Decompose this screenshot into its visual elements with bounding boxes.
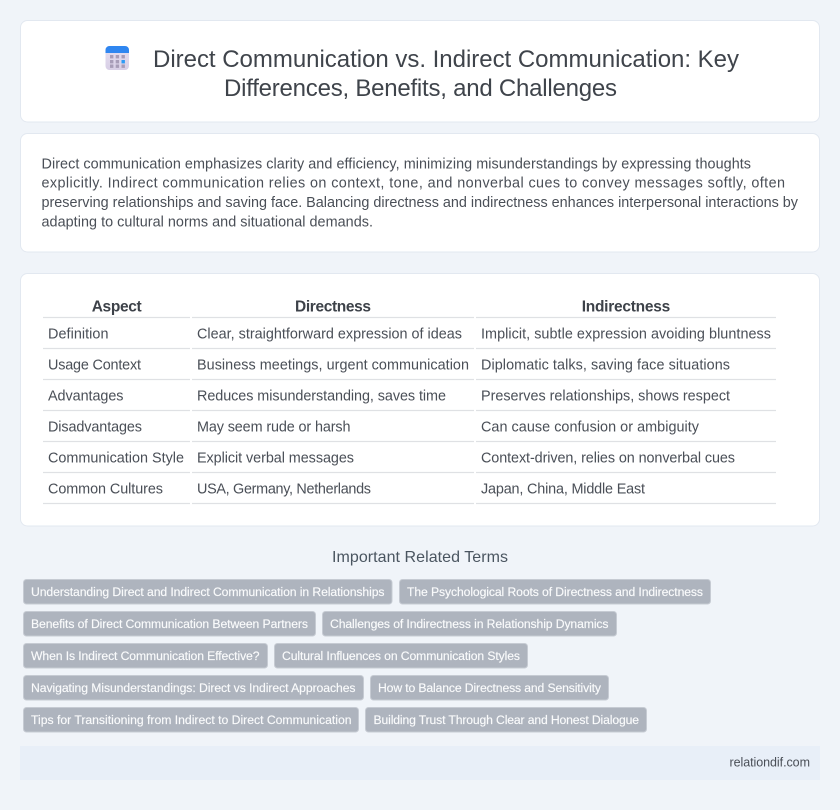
- panel: introduction: [20, 134, 820, 252]
- row: usage context: Diplomatic talks, saving face situations: [481, 358, 730, 374]
- row: common cultures: USA, Germany, Netherlands: [197, 482, 371, 498]
- tag: Cultural Influences on Communication Styles: [282, 649, 520, 663]
- table header: Aspect: [92, 299, 142, 316]
- tag: Understanding Direct and Indirect Communication in Relationships: [31, 585, 384, 599]
- text block: summary: preserving relationships and saving face. Balancing directness and indirectness enhances interpersonal interactions by: [42, 195, 799, 211]
- footer: relationdif.com: [730, 756, 810, 770]
- row: usage context: [48, 358, 730, 374]
- row: definition: Implicit, subtle expression avoiding bluntness: [481, 327, 771, 343]
- row: definition: Clear, straightforward expression of ideas: [197, 327, 462, 343]
- tag: [366, 708, 646, 732]
- tag: When Is Indirect Communication Effective?: [31, 649, 260, 663]
- row: common cultures: Common Cultures: [48, 482, 163, 498]
- row: communication style: Communication Style: [48, 451, 184, 467]
- table header: Directness: [295, 299, 371, 316]
- icon: calendar: [106, 46, 129, 70]
- tag: [400, 580, 710, 604]
- row: usage context: Business meetings, urgent communication: [197, 358, 469, 374]
- text block: summary: adapting to cultural norms and situational demands.: [42, 214, 373, 230]
- table header: [92, 299, 670, 316]
- row: usage context: Usage Context: [48, 358, 141, 374]
- row: advantages: Preserves relationships, shows respect: [481, 389, 730, 405]
- tag: Benefits of Direct Communication Between Partners: [31, 617, 308, 631]
- tag: [24, 580, 392, 604]
- row: disadvantages: [48, 420, 700, 436]
- tag: [322, 612, 616, 636]
- tag: [24, 708, 358, 732]
- heading: related terms: Important Related Terms: [332, 549, 508, 566]
- row: disadvantages: Disadvantages: [48, 420, 142, 436]
- title: Differences, Benefits, and Challenges: [224, 75, 617, 102]
- tag: Building Trust Through Clear and Honest Dialogue: [374, 713, 639, 727]
- tag list: related terms: [24, 580, 710, 732]
- panel: comparison table: [20, 274, 820, 526]
- tag: [370, 676, 608, 700]
- row: advantages: Reduces misunderstanding, saves time: [197, 389, 446, 405]
- row: disadvantages: May seem rude or harsh: [197, 420, 350, 436]
- tag: The Psychological Roots of Directness and Indirectness: [407, 585, 703, 599]
- tag: Tips for Transitioning from Indirect to Direct Communication: [31, 713, 352, 727]
- row: common cultures: Japan, China, Middle East: [481, 482, 645, 498]
- row: common cultures: [48, 482, 645, 498]
- row: disadvantages: Can cause confusion or ambiguity: [481, 420, 700, 436]
- tag: Navigating Misunderstandings: Direct vs Indirect Approaches: [31, 681, 356, 695]
- tag: [24, 612, 316, 636]
- row: advantages: Advantages: [48, 389, 124, 405]
- tag: [24, 676, 364, 700]
- row: communication style: [48, 451, 735, 467]
- row: communication style: Context-driven, relies on nonverbal cues: [481, 451, 735, 467]
- tag: How to Balance Directness and Sensitivity: [378, 681, 602, 695]
- panel: header: [20, 20, 820, 122]
- row: advantages: [48, 389, 730, 405]
- row: definition: Definition: [48, 327, 108, 343]
- row: communication style: Explicit verbal messages: [197, 451, 354, 467]
- row: definition: [48, 327, 771, 343]
- text block: summary: Direct communication emphasizes clarity and efficiency, minimizing misunderstandings by expressing thoughts: [42, 156, 751, 172]
- tag: Challenges of Indirectness in Relationship Dynamics: [330, 617, 608, 631]
- text block: summary: explicitly. Indirect communication relies on context, tone, and nonverbal cues to convey messages softly, often: [42, 176, 785, 192]
- title: Direct Communication vs. Indirect Communication: Key: [153, 46, 739, 73]
- text block: summary: [42, 156, 799, 230]
- table header: Indirectness: [582, 299, 670, 316]
- tag: [24, 644, 268, 668]
- footer: [20, 746, 820, 780]
- tag: [274, 644, 528, 668]
